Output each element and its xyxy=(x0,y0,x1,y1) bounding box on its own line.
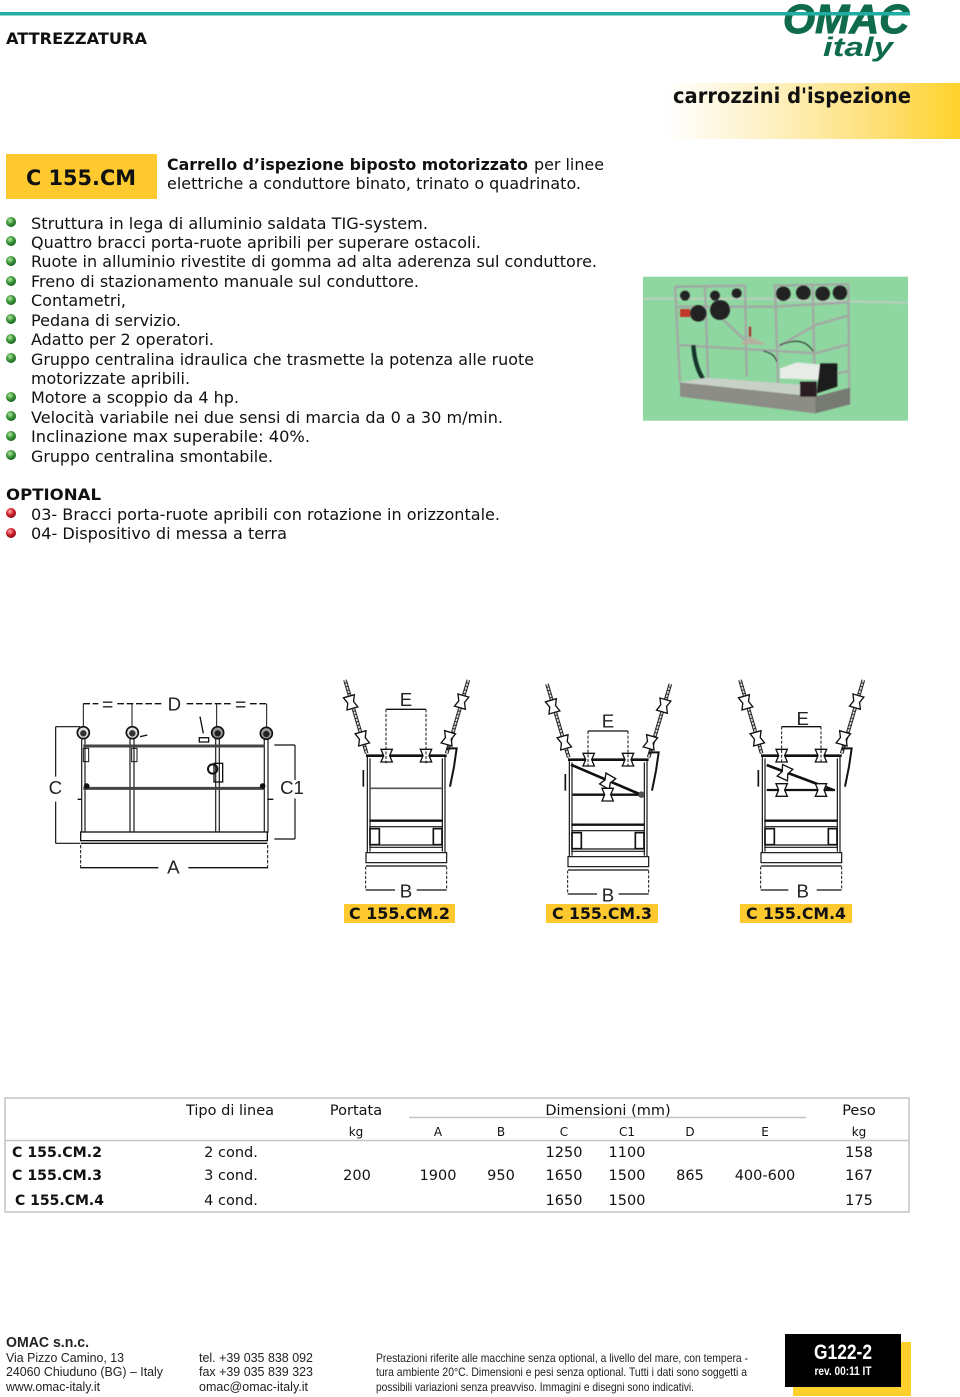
dimension A: A xyxy=(167,856,180,877)
product photo xyxy=(643,277,908,421)
row: C 155.CM.4: 175 xyxy=(845,1193,873,1209)
table header row: A xyxy=(434,1125,443,1139)
product title: elettriche a conduttore binato, trinato o quadrinato. xyxy=(167,174,581,193)
drawing: front elevation with dimensions A C C1 D xyxy=(49,694,304,877)
row: C 155.CM.3: C 155.CM.3 xyxy=(12,1168,102,1184)
page section heading: ATTREZZATURA xyxy=(6,29,148,48)
table header row: D xyxy=(685,1125,695,1139)
table header row: kg xyxy=(349,1125,363,1139)
row: C 155.CM.3: 167 xyxy=(845,1168,873,1184)
row: C 155.CM.2: 2 cond. xyxy=(204,1145,258,1161)
footer: disclaimer xyxy=(376,1351,748,1394)
drawing: C 155.CM.2 side view xyxy=(343,680,469,901)
table header row: Dimensioni (mm) xyxy=(545,1103,671,1119)
features list: motorizzate apribili. xyxy=(31,369,190,388)
document code badge: G122-2 xyxy=(814,1341,872,1364)
row: C 155.CM.2: C 155.CM.2 xyxy=(12,1145,102,1161)
drawing: C 155.CM.4 side view: E xyxy=(796,708,809,729)
features list: Struttura in lega di alluminio saldata TIG-system. xyxy=(31,214,428,233)
footer: company address xyxy=(5,1335,164,1394)
dimension C1: C1 xyxy=(280,777,304,798)
features list: Contametri, xyxy=(31,291,126,310)
footer: contacts: fax +39 035 839 323 xyxy=(199,1365,313,1379)
drawing: C 155.CM.3 side view: B xyxy=(602,884,614,905)
features list: Gruppo centralina idraulica che trasmette la potenza alle ruote xyxy=(31,350,534,369)
footer: disclaimer: possibili variazioni senza preavviso. Immagini e disegni sono indicativi. xyxy=(376,1380,694,1394)
drawing: C 155.CM.4 side view xyxy=(738,680,864,901)
dimension D xyxy=(83,694,267,727)
drawing: C 155.CM.3 side view: E xyxy=(602,710,614,731)
features list: Quattro bracci porta-ruote apribili per superare ostacoli. xyxy=(31,233,481,252)
row: C 155.CM.4 xyxy=(15,1193,873,1209)
table header row: Peso xyxy=(842,1103,876,1119)
features list: Velocità variabile nei due sensi di marcia da 0 a 30 m/min. xyxy=(31,408,503,427)
table header row: E xyxy=(761,1125,769,1139)
dimension D: = xyxy=(235,694,246,715)
platform frame xyxy=(77,717,273,843)
footer: company address: www.omac-italy.it xyxy=(5,1380,101,1394)
logo: OMAC italy: italy xyxy=(823,32,896,62)
category band xyxy=(665,83,960,139)
features list: Ruote in alluminio rivestite di gomma ad alta aderenza sul conduttore. xyxy=(31,252,597,271)
row: C 155.CM.3: 1650 xyxy=(546,1168,582,1184)
footer: company address: OMAC s.n.c. xyxy=(6,1335,89,1351)
features list: Pedana di servizio. xyxy=(31,311,181,330)
features list: Adatto per 2 operatori. xyxy=(31,330,214,349)
drawing: C 155.CM.4 side view: B xyxy=(796,880,809,901)
footer: company address: Via Pizzo Camino, 13 xyxy=(6,1351,124,1365)
label: C 155.CM.3: C 155.CM.3 xyxy=(552,904,652,923)
header rule xyxy=(0,12,910,16)
drawing: C 155.CM.2 side view: E xyxy=(400,689,412,710)
dimension C1 xyxy=(274,745,304,839)
features list: Inclinazione max superabile: 40%. xyxy=(31,427,310,446)
footer: contacts xyxy=(199,1351,313,1394)
document code badge xyxy=(785,1334,911,1396)
dimension C: C xyxy=(49,777,62,798)
dimension A xyxy=(81,845,268,877)
row: C 155.CM.3: 865 xyxy=(676,1168,704,1184)
dimension C xyxy=(49,727,80,843)
row: C 155.CM.4: 4 cond. xyxy=(204,1193,258,1209)
row: C 155.CM.3: 3 cond. xyxy=(204,1168,258,1184)
row: C 155.CM.3: 1900 xyxy=(420,1168,456,1184)
optional list xyxy=(6,485,500,543)
table header row: C1 xyxy=(619,1125,635,1139)
row: C 155.CM.3: 950 xyxy=(487,1168,515,1184)
footer: contacts: omac@omac-italy.it xyxy=(199,1380,309,1394)
optional list: OPTIONAL xyxy=(6,485,101,504)
features list xyxy=(6,214,597,466)
model code box: C 155.CM xyxy=(26,166,136,190)
row: C 155.CM.4: C 155.CM.4 xyxy=(15,1193,104,1209)
footer: disclaimer: Prestazioni riferite alle macchine senza optional, a livello del mare, con tempera - xyxy=(376,1351,748,1365)
row: C 155.CM.3: 1500 xyxy=(609,1168,645,1184)
row: C 155.CM.4: 1650 xyxy=(546,1193,582,1209)
dimension D: = xyxy=(102,694,113,715)
product title: Carrello d’ispezione biposto motorizzato xyxy=(167,155,528,174)
table header row: Tipo di linea xyxy=(185,1103,274,1119)
logo: OMAC italy xyxy=(783,0,910,62)
row: C 155.CM.3: 200 xyxy=(343,1168,371,1184)
row: C 155.CM.3 xyxy=(12,1168,873,1184)
table header row: B xyxy=(497,1125,505,1139)
document code badge: rev. 00:11 IT xyxy=(814,1366,872,1378)
product title: per linee xyxy=(534,155,604,174)
row: C 155.CM.2: 1250 xyxy=(546,1145,582,1161)
drawing: C 155.CM.3 side view xyxy=(545,684,671,905)
row: C 155.CM.2: 158 xyxy=(845,1145,873,1161)
specifications table xyxy=(5,1098,909,1212)
footer: disclaimer: tura ambiente 20°C. Dimensioni e pesi senza optional. Tutti i dati sono soggetti a xyxy=(376,1365,747,1379)
row: C 155.CM.2: 1100 xyxy=(609,1145,645,1161)
dimension D: D xyxy=(168,694,181,715)
footer: contacts: tel. +39 035 838 092 xyxy=(199,1351,313,1365)
row: C 155.CM.2 xyxy=(12,1145,873,1161)
optional list: 03- Bracci porta-ruote apribili con rotazione in orizzontale. xyxy=(31,505,500,524)
footer: company address: 24060 Chiuduno (BG) – Italy xyxy=(6,1365,164,1379)
table header row: C xyxy=(560,1125,568,1139)
features list: Motore a scoppio da 4 hp. xyxy=(31,388,239,407)
drawing: C 155.CM.2 side view: B xyxy=(400,880,412,901)
table header row xyxy=(185,1103,876,1139)
row: C 155.CM.4: 1500 xyxy=(609,1193,645,1209)
model code box xyxy=(6,154,157,199)
features list: Gruppo centralina smontabile. xyxy=(31,447,273,466)
label: C 155.CM.2: C 155.CM.2 xyxy=(349,904,450,923)
table header row: kg xyxy=(852,1125,866,1139)
features list: Freno di stazionamento manuale sul conduttore. xyxy=(31,272,419,291)
row: C 155.CM.3: 400-600 xyxy=(735,1168,795,1184)
optional list: 04- Dispositivo di messa a terra xyxy=(31,524,287,543)
table header row: Portata xyxy=(330,1103,382,1119)
category band: carrozzini d'ispezione xyxy=(673,84,911,108)
label: C 155.CM.4: C 155.CM.4 xyxy=(746,904,846,923)
product title xyxy=(167,155,604,193)
